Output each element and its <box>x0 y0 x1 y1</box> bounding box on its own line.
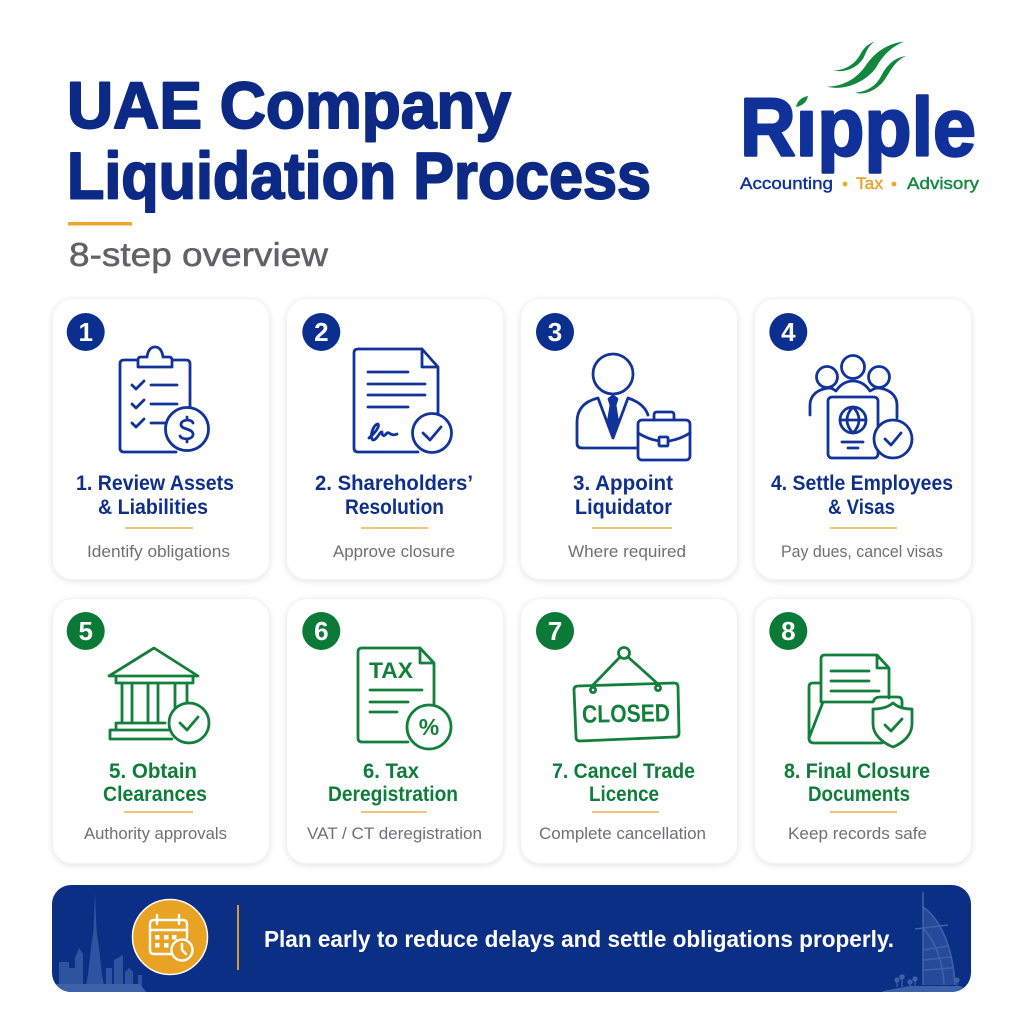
badge 5: 5 <box>78 616 93 646</box>
panel: step 5 <box>52 598 270 864</box>
badge 7: 7 <box>548 616 562 646</box>
panel: step 8 <box>754 598 972 864</box>
heading 4: 4. Settle Employees <box>771 472 953 495</box>
icon: bank with check <box>109 648 209 743</box>
panel: step 3 <box>520 298 738 580</box>
icon: clipboard with dollar <box>120 347 208 452</box>
icon: calendar with clock <box>132 900 208 974</box>
heading 1 <box>76 472 234 519</box>
badge 1 <box>67 313 105 351</box>
icon: closed sign: CLOSED <box>582 699 670 729</box>
panel: step 1 <box>52 298 270 580</box>
icon: liquidator with briefcase <box>577 354 690 460</box>
title: UAE Company <box>67 68 511 142</box>
heading 1: & Liabilities <box>98 496 208 519</box>
icon: folder with shield <box>809 655 912 747</box>
heading 8: Documents <box>808 783 910 806</box>
badge 8 <box>769 612 807 650</box>
description 3: Where required <box>568 542 686 561</box>
heading 5 <box>103 760 207 806</box>
description 1: Identify obligations <box>87 542 230 561</box>
badge 8: 8 <box>781 616 796 646</box>
logo swooshes <box>827 42 906 93</box>
badge 2: 2 <box>314 317 329 347</box>
panel: step 2 <box>286 298 504 580</box>
panel: step 6 <box>286 598 504 864</box>
panel: step 4 <box>754 298 972 580</box>
badge 5 <box>67 612 105 650</box>
icon: signed document <box>354 349 452 452</box>
logo tagline: Accounting <box>740 174 833 193</box>
badge 4: 4 <box>781 317 796 347</box>
heading 1: 1. Review Assets <box>76 472 234 495</box>
title: Liquidation Process <box>67 138 651 212</box>
icon: closed sign <box>574 648 679 741</box>
description 2: Approve closure <box>333 542 455 561</box>
icon: tax document with percent: TAX <box>369 658 413 683</box>
panel: footer banner <box>52 885 972 993</box>
badge 6 <box>302 612 340 650</box>
subtitle: 8-step overview <box>69 237 329 274</box>
skyline: Dubai towers <box>52 893 146 992</box>
heading 5: Clearances <box>103 783 207 806</box>
icon: tax document with percent <box>358 648 451 749</box>
badge 3 <box>536 313 574 351</box>
heading 3: Liquidator <box>575 496 672 519</box>
badge 6: 6 <box>314 616 329 646</box>
heading 7: Licence <box>589 783 659 806</box>
heading 6: Deregistration <box>328 783 458 806</box>
heading 7: 7. Cancel Trade <box>552 760 695 783</box>
logo tagline: Tax <box>856 174 883 193</box>
heading 8: 8. Final Closure <box>784 760 930 783</box>
heading 5: 5. Obtain <box>109 760 197 783</box>
badge 3: 3 <box>548 317 562 347</box>
icon: team with passport <box>810 356 912 458</box>
description 6: VAT / CT deregistration <box>307 824 482 843</box>
description 8: Keep records safe <box>788 824 927 843</box>
heading 2 <box>315 472 473 519</box>
skyline: Burj Al Arab <box>883 892 972 993</box>
heading 6: 6. Tax <box>363 760 419 783</box>
logo tagline <box>740 174 980 193</box>
badge 7 <box>536 612 574 650</box>
badge 1: 1 <box>78 317 93 347</box>
heading 8 <box>784 760 930 806</box>
logo tagline: Advisory <box>907 174 980 193</box>
description 7: Complete cancellation <box>539 824 706 843</box>
title <box>67 68 651 212</box>
panel: step 7 <box>520 598 738 864</box>
description 5: Authority approvals <box>84 824 227 843</box>
heading 6 <box>328 760 458 806</box>
description 4: Pay dues, cancel visas <box>781 542 943 561</box>
badge 2 <box>302 313 340 351</box>
logo leaf accent <box>793 90 815 108</box>
title accent line <box>68 222 132 226</box>
heading 3: 3. Appoint <box>573 472 673 495</box>
icon: tax document with percent: % <box>419 714 439 740</box>
banner message: Plan early to reduce delays and settle obligations properly. <box>264 926 894 952</box>
heading 7 <box>552 760 695 806</box>
heading 4: & Visas <box>828 496 895 519</box>
heading 2: 2. Shareholders’ <box>315 472 473 495</box>
logo wordmark: Ripple <box>740 80 976 174</box>
badge 4 <box>769 313 807 351</box>
heading 4 <box>771 472 953 519</box>
heading 3 <box>573 472 673 519</box>
logo: Ripple <box>740 42 980 193</box>
heading 2: Resolution <box>345 496 444 519</box>
